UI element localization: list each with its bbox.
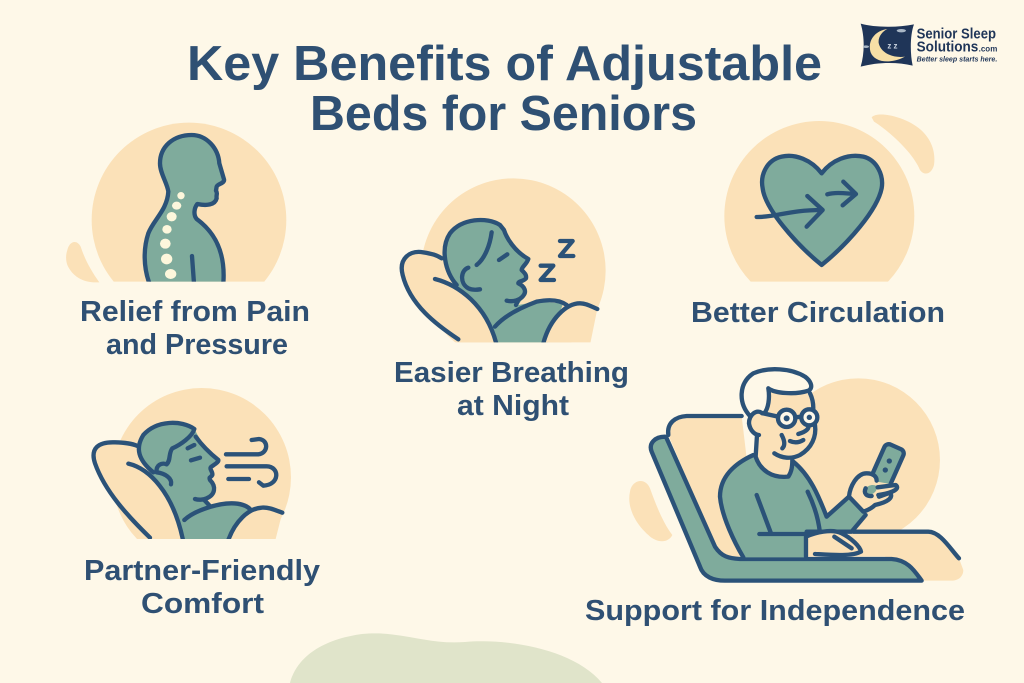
remote control <box>869 443 905 491</box>
logo wordmark: Better sleep starts here. <box>917 57 997 64</box>
hand on lap <box>806 531 861 557</box>
mattress <box>825 532 963 581</box>
icon: sleeping head with zzz <box>402 178 606 363</box>
glasses <box>763 409 817 427</box>
icon: heart with arrows <box>724 114 934 282</box>
zzz <box>541 241 573 280</box>
icon: resting head with breath lines <box>91 388 291 539</box>
backrest cushion <box>668 416 758 557</box>
shirt <box>720 455 866 557</box>
icon: senior in adjustable bed with remote <box>629 369 963 581</box>
spine dots <box>160 192 185 279</box>
label <box>80 296 310 361</box>
label <box>84 555 320 620</box>
label: Relief from Pain <box>80 296 310 328</box>
holding hand <box>849 473 898 512</box>
logo wordmark <box>917 27 997 64</box>
title: Key Benefits of Adjustable <box>187 37 822 91</box>
label: and Pressure <box>106 329 288 361</box>
logo wordmark: .com <box>979 45 997 54</box>
logo wordmark: Solutions <box>917 40 978 56</box>
label: Better Circulation <box>691 297 945 329</box>
label: Partner-Friendly <box>84 555 320 587</box>
logo: Senior Sleep Solutions <box>861 24 997 67</box>
panel: partner-friendly comfort <box>84 388 320 620</box>
label <box>394 357 629 422</box>
panel: relief from pain and pressure <box>66 123 310 361</box>
head and hair <box>748 388 813 477</box>
title <box>187 37 822 141</box>
panel: easier breathing at night <box>394 178 629 422</box>
icon: spine profile <box>66 122 286 282</box>
label: Easier Breathing <box>394 357 629 389</box>
icon: moon pillow: z z <box>887 41 898 50</box>
panel: support for independence <box>585 369 965 627</box>
label: Support for Independence <box>585 595 965 627</box>
label: Comfort <box>141 588 264 620</box>
breath lines <box>226 439 276 486</box>
bottom decorative blob <box>290 633 602 683</box>
logo wordmark: Senior Sleep <box>917 27 996 43</box>
panel: better circulation <box>691 115 945 329</box>
label: at Night <box>457 390 569 422</box>
bed frame <box>651 437 922 581</box>
title: Beds for Seniors <box>310 87 697 141</box>
